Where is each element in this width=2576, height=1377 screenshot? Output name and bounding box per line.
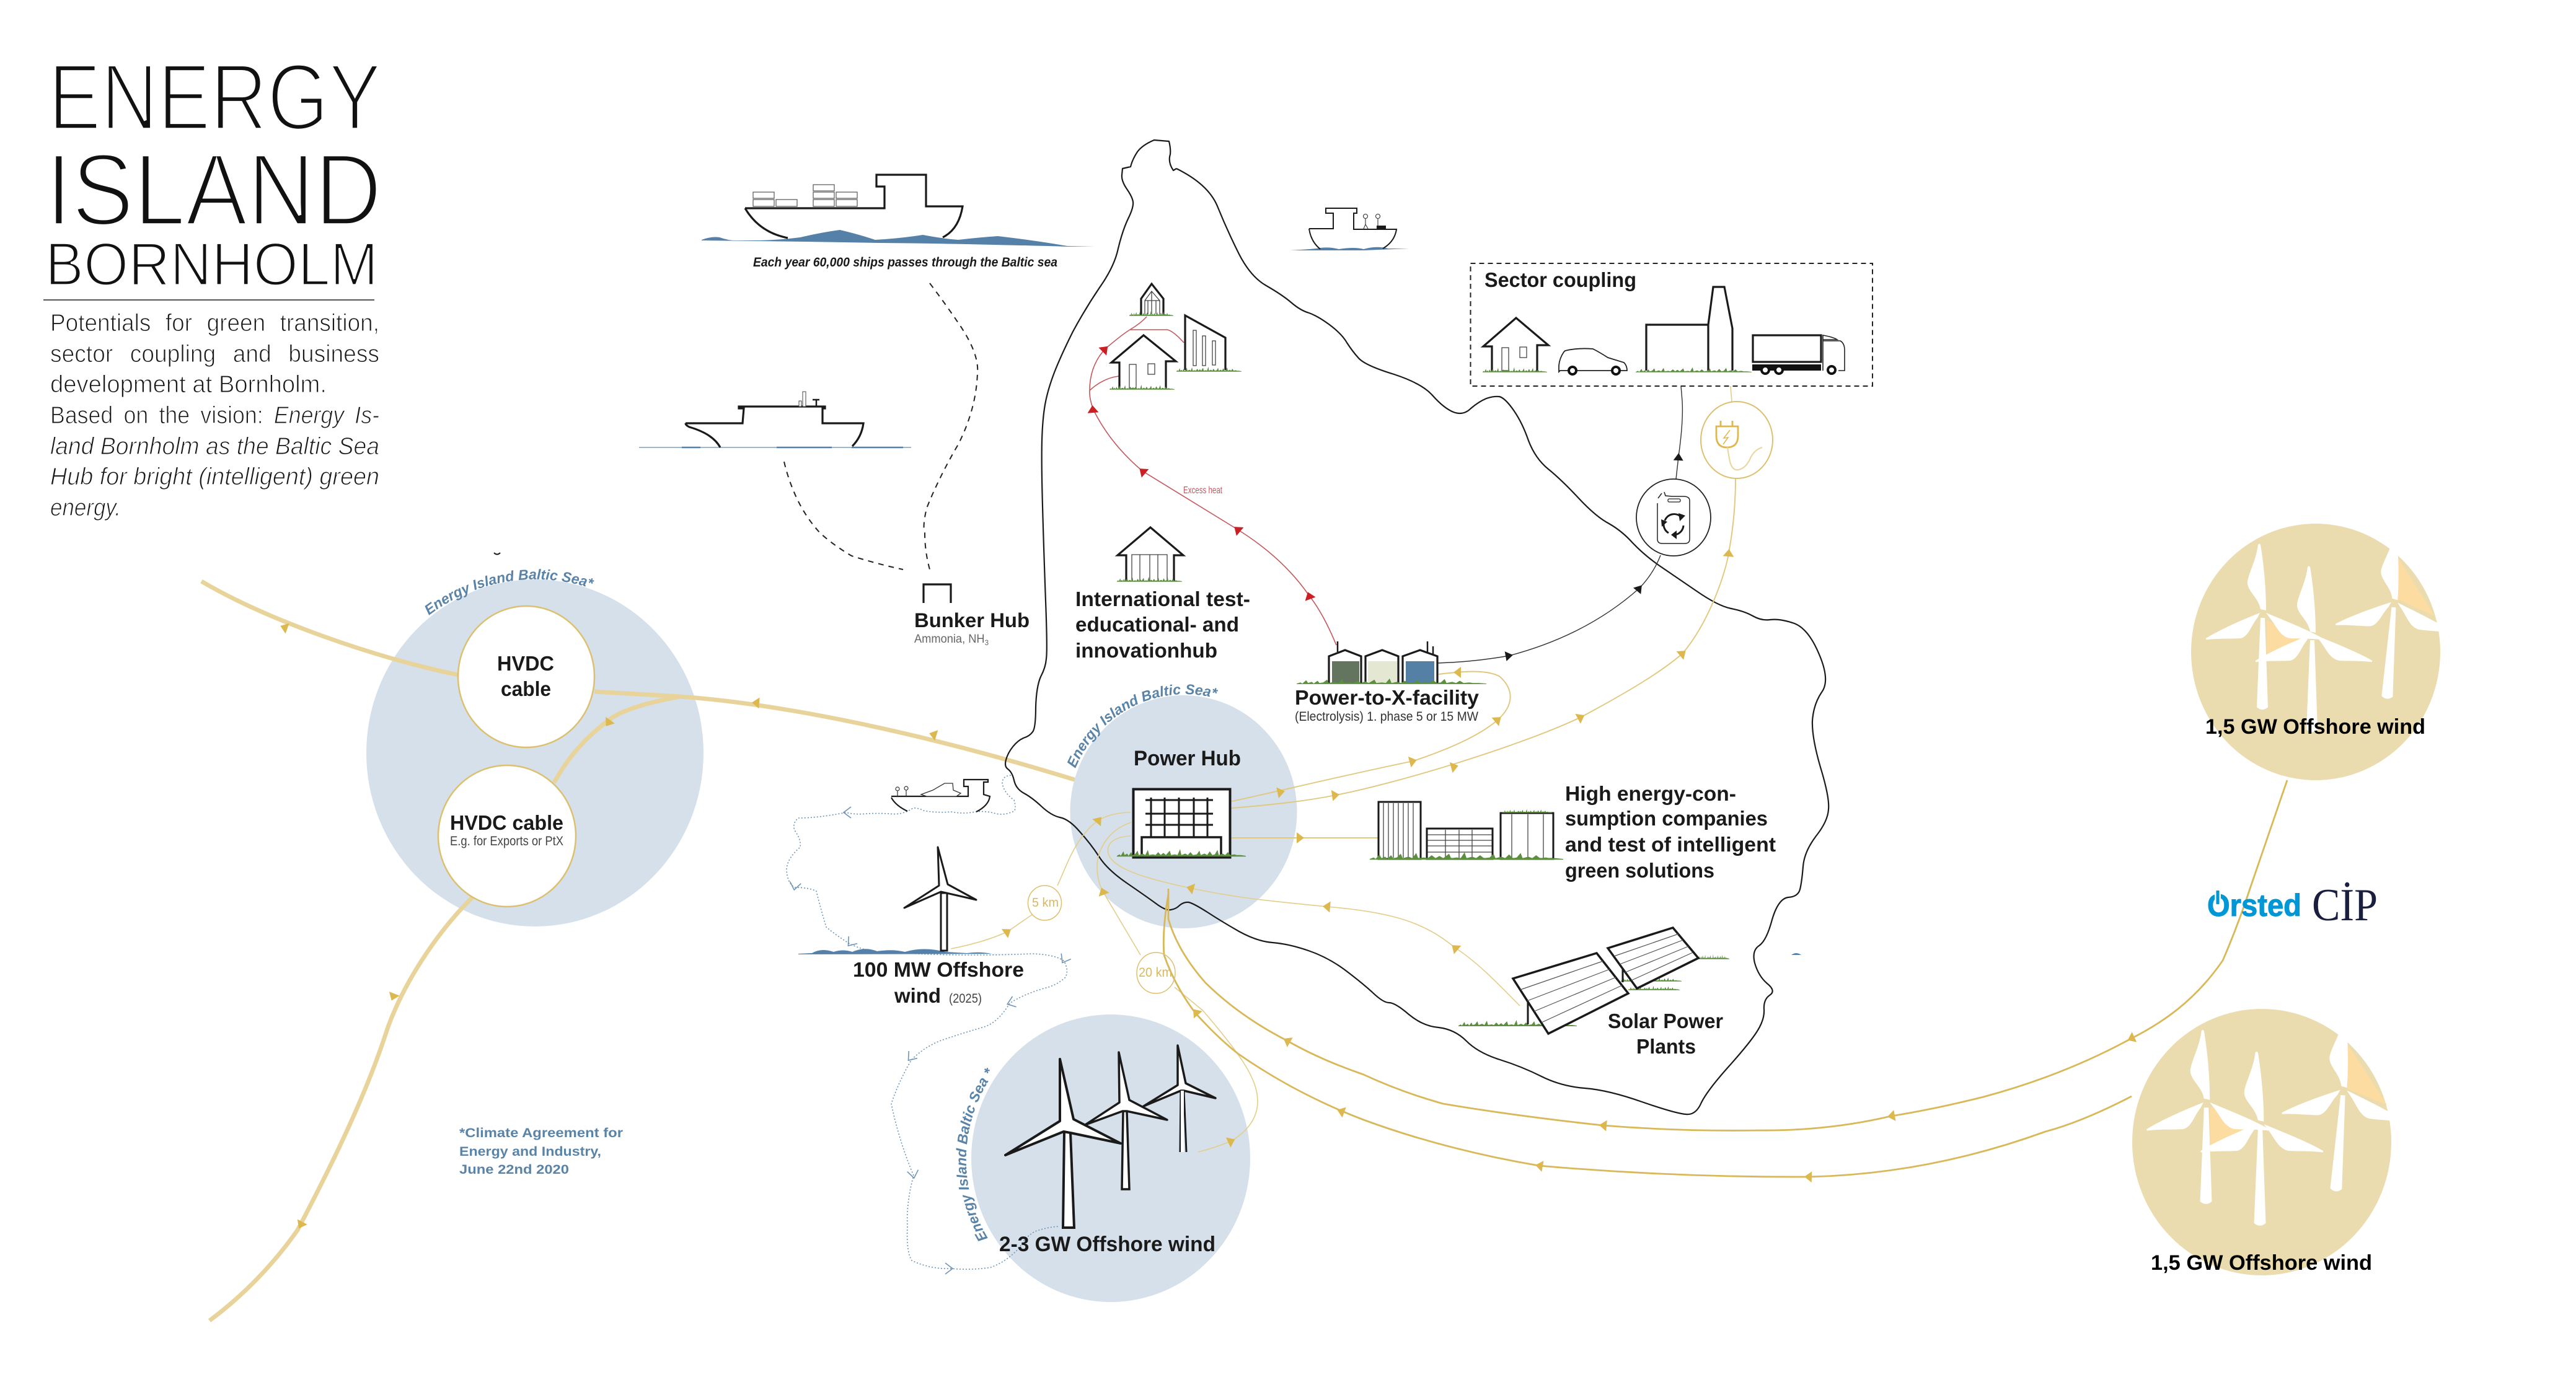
logo: Orsted: Orsted <box>2207 888 2301 923</box>
footnote: June 22nd 2020 <box>459 1163 569 1177</box>
panel: sector coupling: Sector coupling <box>1484 268 1636 291</box>
label: bunker hub: Bunker Hub <box>914 609 1030 631</box>
label: bunker hub <box>914 609 1030 647</box>
Bornholm coastline <box>1005 140 1828 1114</box>
intro text: sector coupling and business <box>50 341 379 367</box>
panel: power hub circle: Energy Island Baltic Sea* <box>1067 684 1218 768</box>
icon: coupling house <box>1483 318 1548 372</box>
label: 100 MW offshore wind: (2025) <box>949 992 982 1006</box>
label: solar power plants <box>1608 1010 1723 1058</box>
intro text <box>50 310 379 521</box>
panel: HVDC energy island <box>366 552 704 926</box>
service vessel <box>891 780 990 812</box>
label: 100 MW offshore wind: wind <box>894 984 941 1007</box>
label: 100 MW offshore wind <box>853 958 1024 1007</box>
footnote: Energy and Industry, <box>459 1145 601 1159</box>
label: high energy consumption: green solutions <box>1565 859 1714 882</box>
icon: fuel can <box>1636 479 1711 556</box>
20 km marker: 20 km <box>1139 966 1172 980</box>
intro text: development at Bornholm. <box>50 371 327 398</box>
ship caption: Each year 60,000 ships passes through the Baltic sea <box>753 255 1057 270</box>
icon: power hub substation <box>1117 790 1246 858</box>
label: innovation hub: innovationhub <box>1075 639 1217 662</box>
red excess heat network <box>1087 317 1336 645</box>
power cables west <box>201 581 1131 1321</box>
icon: 100 MW offshore turbine <box>798 847 1029 954</box>
intro text: land Bornholm as the Baltic Sea <box>50 433 379 460</box>
black sector coupling line <box>1437 386 1683 663</box>
label: 2-3 GW offshore wind: 2-3 GW Offshore wind <box>999 1233 1215 1256</box>
icon: slanted building <box>1176 315 1242 372</box>
big container ship <box>702 175 1095 247</box>
label: bunker hub: Ammonia, NH <box>914 633 987 646</box>
label: bunker hub: 3 <box>985 638 989 647</box>
panel: sector coupling <box>1470 263 1872 386</box>
intro text: Based on the vision: Energy Is- <box>50 402 379 429</box>
title: BORNHOLM <box>45 230 378 298</box>
HVDC cable exports circle: E.g. for Exports or PtX <box>450 834 563 848</box>
HVDC cable exports circle <box>438 765 576 907</box>
icon: high energy consumption buildings <box>1370 802 1563 860</box>
panel: 2-3 GW offshore circle: Energy Island Baltic Sea * <box>956 1068 990 1241</box>
icon: electricity plug <box>1701 402 1773 478</box>
panel: lower 1,5 GW offshore wind: 1,5 GW Offshore wind <box>2151 1251 2372 1275</box>
label: power hub: Power Hub <box>1134 747 1241 770</box>
icon: house <box>1109 335 1176 390</box>
footnote: *Climate Agreement for <box>459 1126 623 1140</box>
intro text: Hub for bright (intelligent) green <box>50 464 379 490</box>
blue dotted service route <box>787 775 1071 1274</box>
ferry ship <box>639 392 911 447</box>
icon: bunker hub <box>924 584 951 603</box>
survey boat <box>1290 208 1409 250</box>
panel: 2-3 GW offshore circle <box>956 1014 1250 1302</box>
icon: car <box>1559 348 1627 374</box>
label: 100 MW offshore wind: 100 MW Offshore <box>853 958 1024 981</box>
footnote <box>459 1126 623 1177</box>
icon: factory <box>1636 287 1752 372</box>
HVDC cable circle <box>458 606 594 747</box>
icon: greenhouse <box>1129 284 1173 316</box>
label: high energy consumption: sumption companies <box>1565 807 1768 830</box>
logo: CIP: CİP <box>2312 880 2378 931</box>
5 km marker: 5 km <box>1032 896 1059 910</box>
intro text: energy. <box>50 495 121 521</box>
panel: upper 1,5 GW offshore wind: 1,5 GW Offshore wind <box>2205 715 2425 739</box>
label: high energy consumption <box>1565 782 1776 882</box>
20 km marker <box>1137 952 1175 993</box>
panel: HVDC energy island: Energy Island Baltic Sea* <box>425 569 594 615</box>
dashed shipping routes <box>784 283 977 570</box>
icon: power-to-x facility <box>1297 641 1486 684</box>
red excess heat network: Excess heat <box>1183 485 1222 496</box>
icon: 2-3 GW offshore turbines <box>1005 1045 1215 1228</box>
thick gold cables from 1,5 GW offshore wind <box>1163 780 2287 1182</box>
panel: lower 1,5 GW offshore wind <box>2132 1009 2411 1275</box>
icon: test and innovation hub <box>1117 527 1183 582</box>
panel: power hub circle <box>1067 684 1297 928</box>
label: power-to-x facility <box>1295 686 1480 724</box>
HVDC cable exports circle: HVDC cable <box>450 811 563 834</box>
label: innovation hub: International test- <box>1075 587 1250 610</box>
label: innovation hub <box>1075 587 1250 662</box>
label: solar power plants: Plants <box>1636 1035 1696 1058</box>
intro text: Potentials for green transition, <box>50 310 379 337</box>
icon: truck <box>1752 335 1845 374</box>
title: ENERGY <box>48 45 381 150</box>
label: power-to-x facility: Power-to-X-facility <box>1295 686 1480 709</box>
label: high energy consumption: and test of intelligent <box>1565 833 1776 856</box>
title <box>43 45 382 301</box>
HVDC cable circle: HVDC <box>497 652 554 675</box>
label: solar power plants: Solar Power <box>1608 1010 1723 1032</box>
label: innovation hub: educational- and <box>1075 613 1239 636</box>
icon: solar panels <box>1458 928 1801 1034</box>
title: ISLAND <box>46 133 382 247</box>
5 km marker <box>1028 886 1061 920</box>
label: power-to-x facility: (Electrolysis) 1. phase 5 or 15 MW <box>1295 710 1478 724</box>
panel: upper 1,5 GW offshore wind <box>2191 524 2459 780</box>
label: high energy consumption: High energy-con- <box>1565 782 1736 805</box>
thin gold connections on the island <box>951 386 1736 1152</box>
HVDC cable circle: cable <box>501 677 551 700</box>
